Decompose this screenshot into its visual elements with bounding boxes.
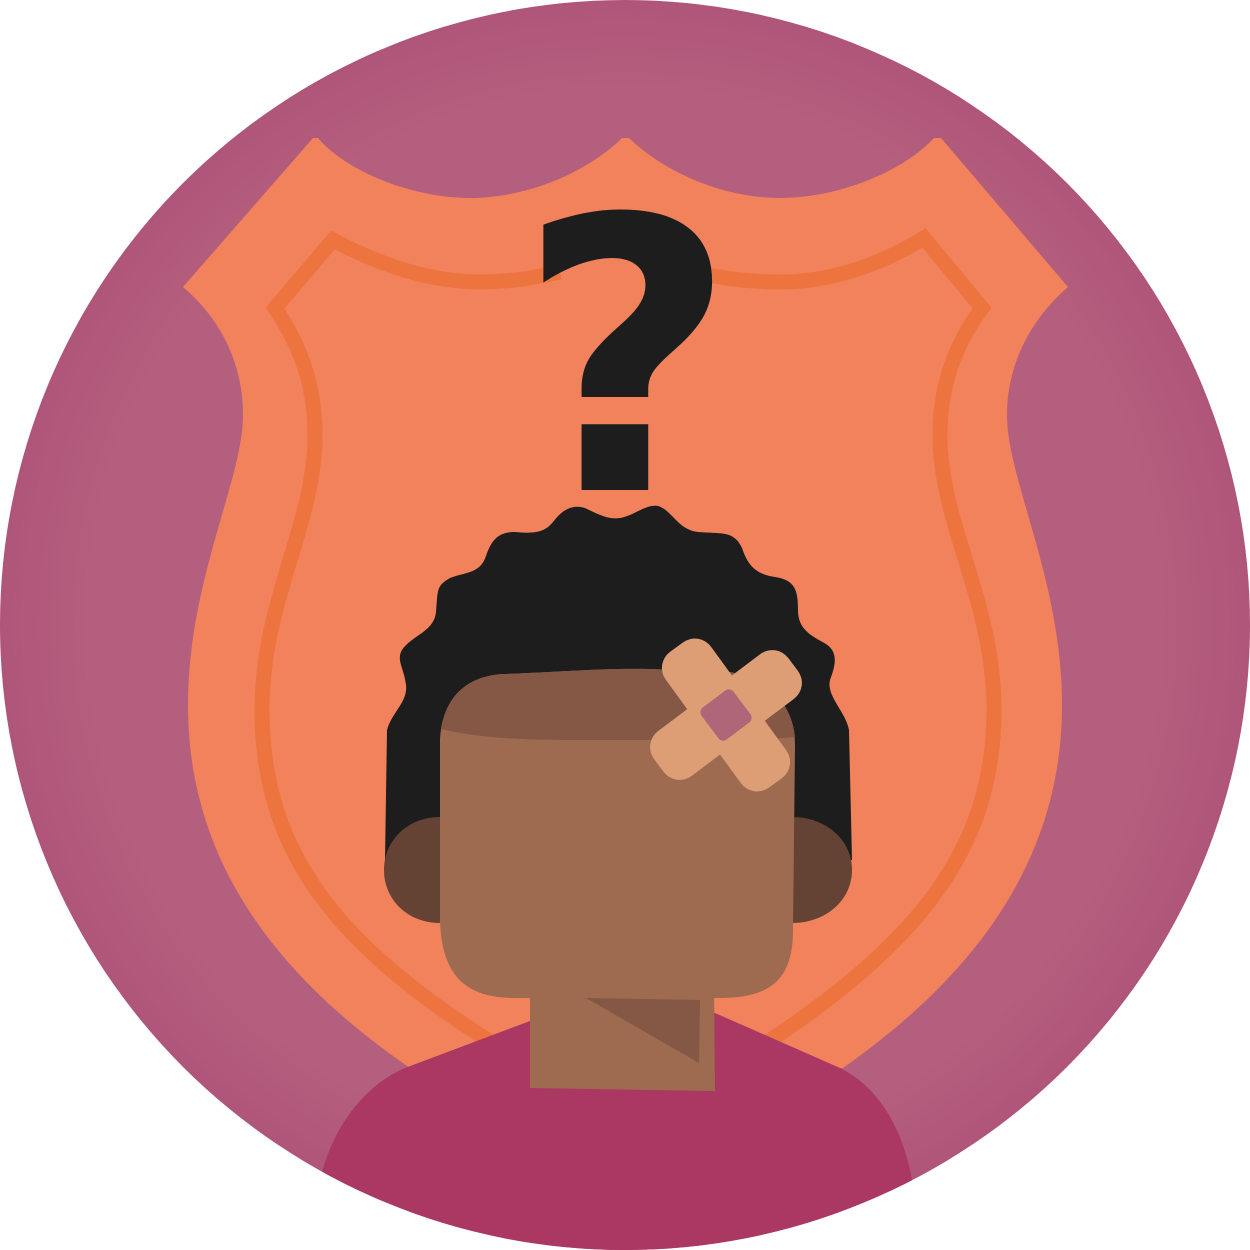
shield inner outline	[262, 238, 994, 1060]
bandage strip one	[654, 631, 798, 799]
forehead shadow	[441, 669, 795, 740]
hair	[385, 506, 852, 860]
bandage	[642, 631, 810, 799]
ear right	[792, 817, 852, 923]
neck	[530, 980, 715, 1091]
bandage strip two	[642, 642, 810, 788]
question mark: ?	[517, 140, 737, 580]
face	[440, 669, 795, 998]
ear left	[384, 817, 440, 923]
torso	[322, 1013, 912, 1250]
bandage pad	[698, 687, 754, 743]
shield	[183, 138, 1068, 1068]
neck shadow	[586, 998, 700, 1063]
